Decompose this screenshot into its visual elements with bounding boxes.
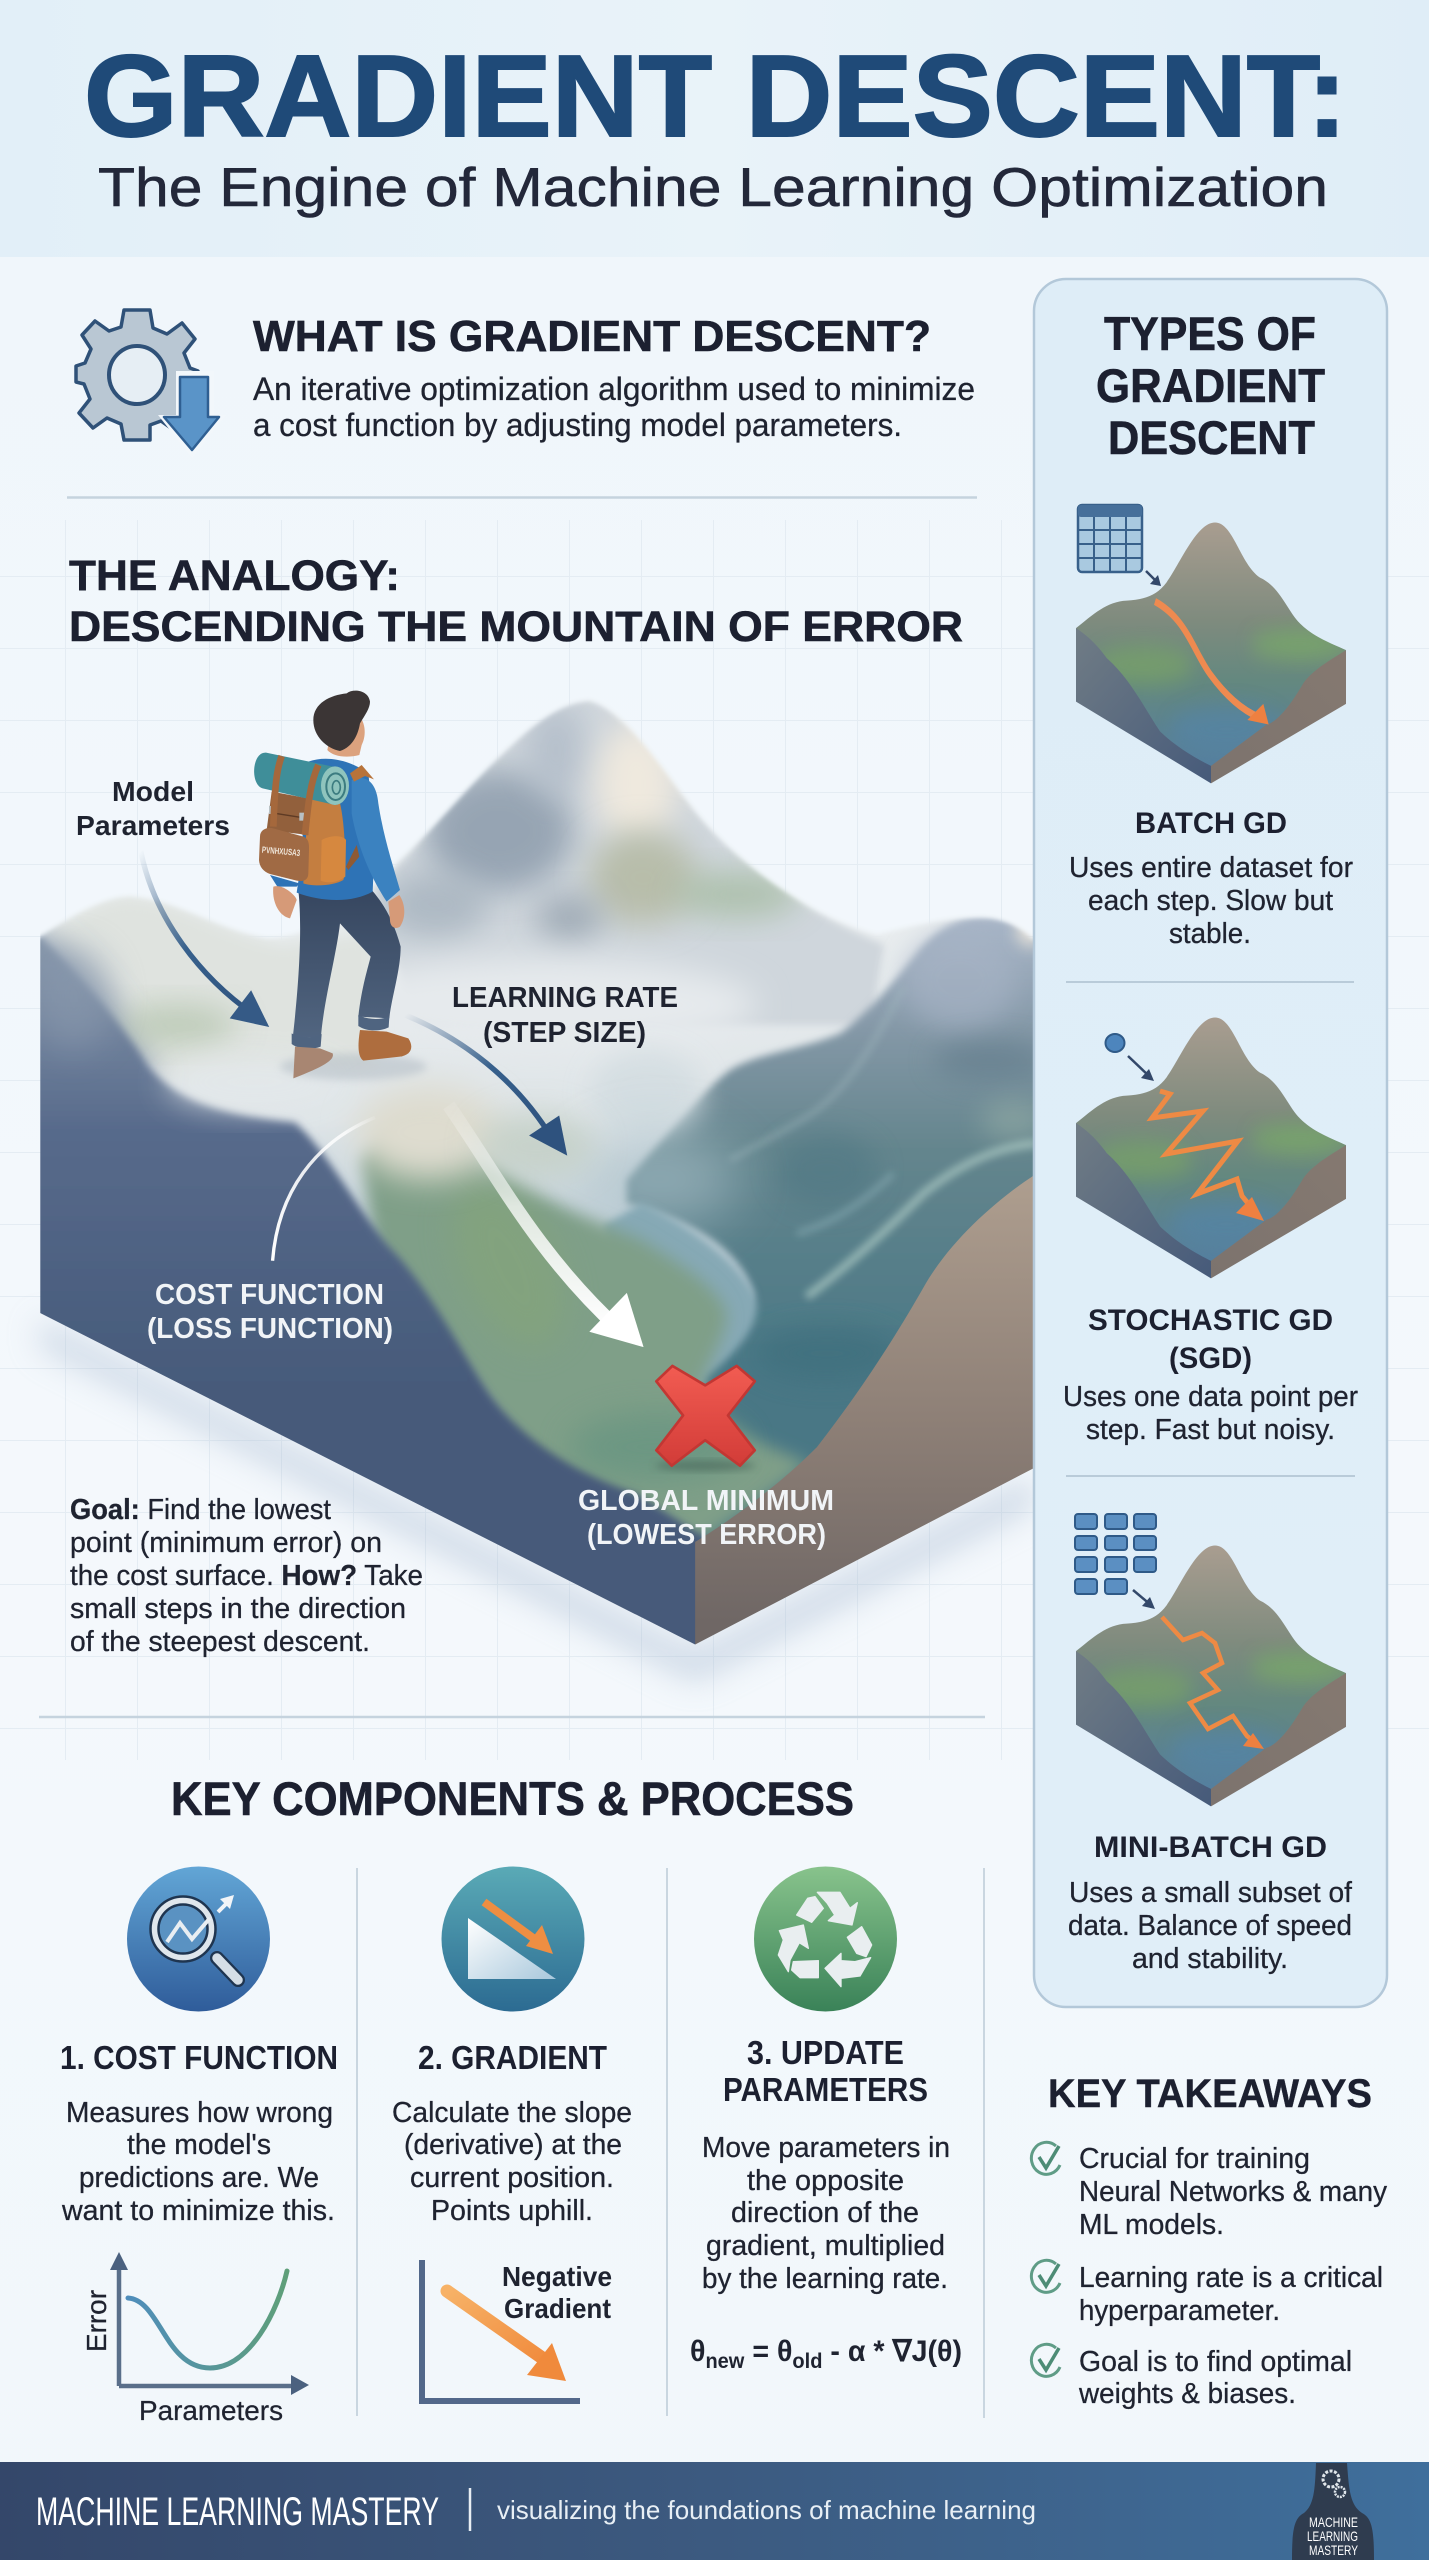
label: learning rate (452, 982, 678, 1049)
description: Measures how wrong (66, 2097, 333, 2129)
arrow: model parameters (141, 851, 269, 1027)
label: model parameters: Parameters (76, 810, 230, 841)
mini mountain (1076, 1018, 1350, 1278)
type: batch gd (1069, 505, 1353, 950)
noisy path (1152, 1091, 1264, 1221)
description: (derivative) at the (404, 2129, 622, 2161)
heading: 2. GRADIENT (418, 2039, 607, 2076)
description: current position. (410, 2162, 614, 2194)
boots (293, 1047, 333, 1078)
bedroll (254, 753, 348, 805)
label: global minimum (578, 1485, 834, 1551)
panel heading: DESCENT (1108, 411, 1315, 464)
text block: goal (70, 1494, 423, 1658)
mountain streaks (732, 1032, 880, 1160)
column: gradient (392, 1866, 632, 2401)
description: predictions are. We (79, 2162, 319, 2194)
icon: gear with down arrow (76, 310, 226, 458)
fog fading the left flank (590, 1050, 703, 1137)
name: BATCH GD (1135, 807, 1287, 840)
panel heading: TYPES OF (1104, 307, 1316, 360)
description: and stability. (1132, 1943, 1288, 1975)
heading: the analogy: THE ANALOGY: (69, 552, 400, 600)
section: what is gradient descent (76, 310, 975, 458)
label: model parameters: Model (112, 776, 194, 807)
title: GRADIENT DESCENT: (84, 31, 1347, 161)
description: each step. Slow but (1088, 885, 1333, 917)
formula: - α * ∇J(θ) (822, 2335, 962, 2368)
takeaway 1 (1031, 2142, 1387, 2241)
illustration: mountain of error (34, 700, 1033, 1688)
description: gradient, multiplied (706, 2230, 945, 2262)
type: stochastic gd (1063, 1018, 1358, 1446)
takeaway 1: ML models. (1079, 2209, 1224, 2241)
header band (0, 0, 1429, 257)
description: Points uphill. (431, 2195, 593, 2227)
takeaway 3: weights & biases. (1078, 2378, 1296, 2410)
takeaway 1: Crucial for training (1079, 2143, 1310, 2175)
icon: red x global minimum (655, 1366, 755, 1471)
arrow: cost function (273, 1117, 375, 1261)
subtitle: The Engine of Machine Learning Optimization (98, 156, 1328, 218)
back mountain (373, 700, 884, 1026)
description: a cost function by adjusting model parameters. (253, 407, 902, 443)
type: mini-batch gd (1068, 1514, 1353, 1975)
tagline: visualizing the foundations of machine learning (497, 2495, 1036, 2525)
name: MINI-BATCH GD (1094, 1831, 1327, 1864)
column: update parameters (690, 1866, 962, 2373)
mini-batch path (1162, 1617, 1264, 1749)
mini mountain (1076, 523, 1350, 783)
panel: types of gradient descent (1034, 279, 1387, 2007)
icon: data table (1078, 505, 1161, 586)
takeaway 2 (1031, 2260, 1383, 2327)
hiker: PVNHXUSA3 (261, 845, 301, 858)
heading: the analogy (69, 552, 963, 651)
label: global minimum: (LOWEST ERROR) (587, 1519, 826, 1551)
description: direction of the (731, 2197, 919, 2229)
right face (695, 1176, 1033, 1644)
heading: PARAMETERS (723, 2071, 928, 2108)
logo: MACHINE (1309, 2514, 1358, 2530)
description (1068, 1877, 1353, 1975)
left ridge (40, 898, 374, 1078)
panel heading: GRADIENT (1096, 359, 1325, 412)
icon: recycle (754, 1866, 897, 2012)
description: stable. (1169, 918, 1251, 950)
heading: 1. COST FUNCTION (60, 2039, 338, 2076)
label: global minimum: GLOBAL MINIMUM (578, 1485, 834, 1517)
hiker (254, 691, 427, 1080)
mini mountain (1076, 1546, 1350, 1806)
description: Calculate the slope (392, 2097, 632, 2129)
backpack (350, 765, 374, 782)
description: Uses entire dataset for (1069, 852, 1353, 884)
panel heading (1096, 307, 1325, 464)
icon: data batches (1075, 1514, 1156, 1609)
heading: the analogy: DESCENDING THE MOUNTAIN OF ERROR (69, 603, 963, 651)
description: by the learning rate. (702, 2263, 948, 2295)
torso and arm (270, 875, 299, 887)
formula: = θ (744, 2335, 792, 2368)
label: cost function: (LOSS FUNCTION) (147, 1313, 393, 1345)
description: step. Fast but noisy. (1086, 1414, 1335, 1446)
name: STOCHASTIC GD (1088, 1304, 1333, 1337)
heading: key components: KEY COMPONENTS & PROCESS (171, 1772, 854, 1825)
formula: new (705, 2350, 745, 2373)
description: want to minimize this. (61, 2195, 335, 2227)
heading: 3. UPDATE (747, 2034, 904, 2071)
description (1063, 1381, 1358, 1446)
text block: goal: point (minimum error) on (70, 1527, 382, 1559)
footer (0, 2462, 1429, 2560)
head (327, 717, 365, 757)
left face (40, 936, 707, 1644)
label: cost function (147, 1279, 393, 1345)
name: (SGD) (1169, 1342, 1252, 1375)
description: the opposite (747, 2165, 904, 2197)
takeaway 3: Goal is to find optimal (1079, 2346, 1352, 2378)
takeaway 2: hyperparameter. (1079, 2295, 1280, 2327)
description (392, 2097, 632, 2227)
logo: LEARNING (1307, 2528, 1358, 2544)
text block: goal: small steps in the direction (70, 1593, 406, 1625)
description (702, 2132, 950, 2295)
text block: goal: of the steepest descent. (70, 1626, 370, 1658)
description (61, 2097, 335, 2227)
description: An iterative optimization algorithm used to minimize (253, 371, 975, 407)
description: the model's (127, 2129, 271, 2161)
arrow: descent direction (449, 1105, 644, 1347)
brand: MACHINE LEARNING MASTERY (36, 2490, 439, 2534)
description: Uses one data point per (1063, 1381, 1358, 1413)
label: learning rate: (STEP SIZE) (483, 1017, 646, 1049)
name (1088, 1304, 1333, 1375)
heading (723, 2034, 928, 2108)
label: model parameters (76, 776, 230, 841)
green valley (355, 1085, 810, 1547)
icon: magnifier (127, 1866, 270, 2012)
formula: θ (690, 2335, 706, 2368)
text block: goal: the cost surface. How? Take (70, 1560, 423, 1592)
logo: MASTERY (1309, 2542, 1358, 2558)
label: learning rate: LEARNING RATE (452, 982, 678, 1014)
description: Uses a small subset of (1069, 1877, 1353, 1909)
description (253, 371, 975, 443)
description: Move parameters in (702, 2132, 950, 2164)
heading: KEY TAKEAWAYS (1048, 2072, 1372, 2116)
takeaway 2: Learning rate is a critical (1079, 2262, 1383, 2294)
chart: negative gradient: Negative (502, 2261, 612, 2292)
chart: error curve: Error (81, 2290, 112, 2352)
right mountain (590, 913, 1050, 1613)
logo (1292, 2463, 1374, 2560)
heading: WHAT IS GRADIENT DESCENT? (253, 312, 931, 361)
icon: data point (1106, 1034, 1154, 1081)
takeaway 1: Neural Networks & many (1079, 2176, 1387, 2208)
chart: negative gradient (422, 2260, 612, 2401)
takeaway 3 (1031, 2344, 1352, 2410)
label: cost function: COST FUNCTION (155, 1279, 384, 1311)
chart: negative gradient: Gradient (504, 2293, 611, 2324)
chart: error curve (81, 2252, 309, 2426)
description: data. Balance of speed (1068, 1910, 1352, 1942)
legs (293, 890, 401, 1038)
icon: slope (442, 1866, 584, 2012)
description (1069, 852, 1353, 950)
arrow: learning rate (405, 1015, 567, 1156)
formula: old (792, 2350, 822, 2373)
text block: goal: Goal: Find the lowest (70, 1494, 331, 1526)
section: key takeaways (1031, 2072, 1387, 2410)
column: cost function (60, 1866, 338, 2426)
chart: error curve: Parameters (139, 2395, 283, 2426)
